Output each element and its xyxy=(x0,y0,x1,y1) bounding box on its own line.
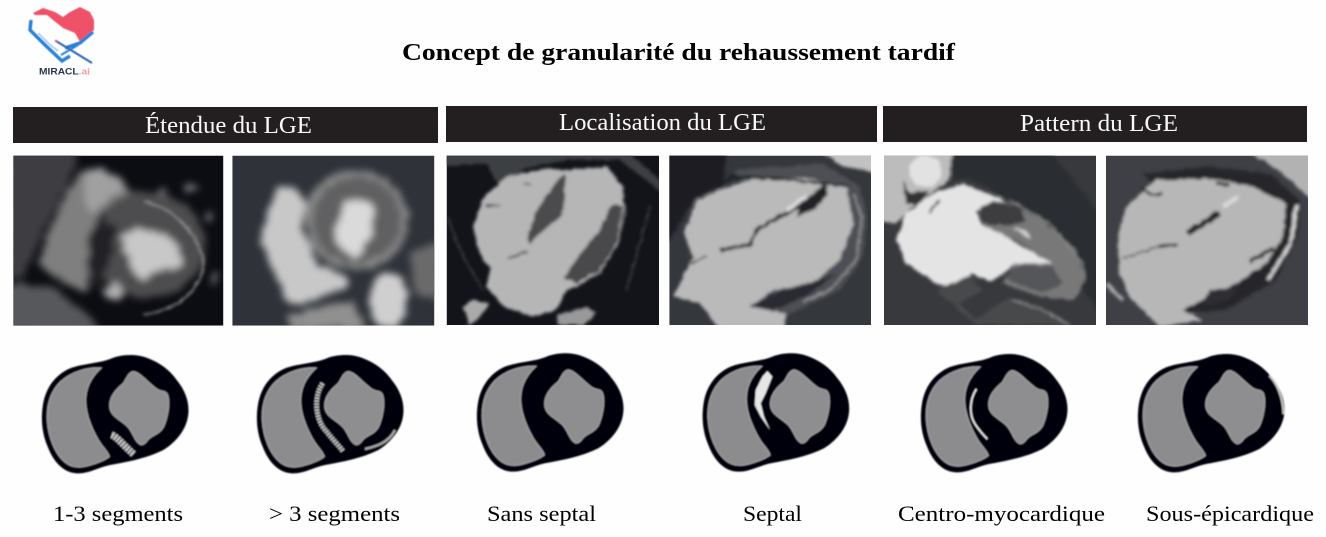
panel: Localisation du LGE header: Localisation du LGE xyxy=(559,110,766,136)
panel: Pattern du LGE header: Pattern du LGE xyxy=(1020,111,1178,137)
MRI image: four chamber sans septal xyxy=(440,150,663,325)
MRI image: short axis > 3 segments xyxy=(232,156,440,330)
label: Sans septal: Sans septal xyxy=(487,501,596,526)
logo: MIRACL.ai heart: MIRACL .ai xyxy=(39,66,90,78)
title: Concept de granularité du rehaussement tardif xyxy=(402,39,956,66)
panel: Étendue du LGE header: Étendue du LGE xyxy=(145,113,312,139)
label: 1-3 segments: 1-3 segments xyxy=(53,501,183,526)
label: Septal: Septal xyxy=(743,501,802,526)
MRI image: four chamber sous-epicardique xyxy=(1106,150,1313,327)
diagram: centro-myocardique xyxy=(921,354,1067,472)
panel: Localisation du LGE header xyxy=(446,106,877,142)
logo: MIRACL.ai heart xyxy=(30,7,94,78)
panel: Pattern du LGE header xyxy=(883,106,1307,142)
label: Sous-épicardique: Sous-épicardique xyxy=(1146,501,1314,526)
panel: Étendue du LGE header xyxy=(13,107,438,143)
MRI image: long axis centro-myocardique xyxy=(876,150,1103,325)
diagram: > 3 segments xyxy=(257,355,403,473)
MRI image: four chamber septal xyxy=(669,156,871,325)
label: Centro-myocardique: Centro-myocardique xyxy=(898,501,1105,526)
diagram: sous-epicardique xyxy=(1138,354,1284,472)
diagram: 1-3 segments xyxy=(42,355,188,473)
diagram: sans septal xyxy=(477,353,623,472)
label: > 3 segments: > 3 segments xyxy=(269,501,400,526)
diagram: septal xyxy=(703,353,849,472)
MRI image: short axis 1-3 segments xyxy=(7,150,223,333)
